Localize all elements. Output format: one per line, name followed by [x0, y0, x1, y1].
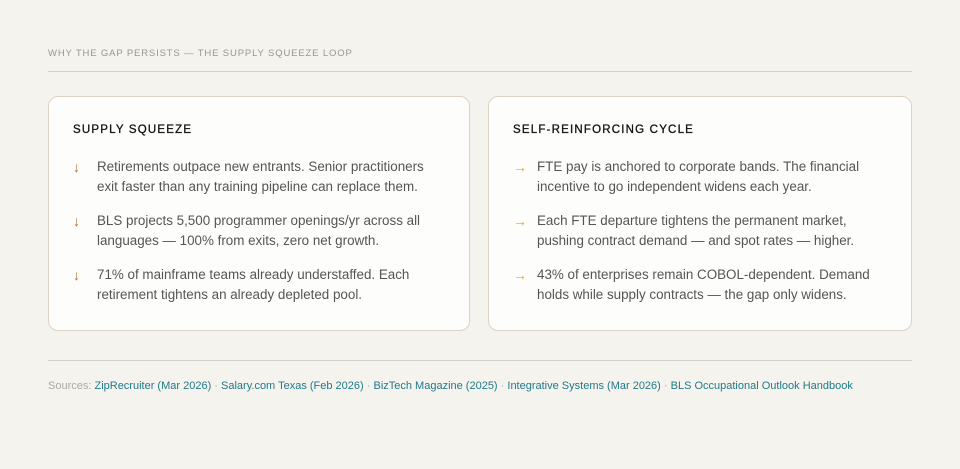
item 2: →	[513, 213, 527, 229]
heading: cycle: SELF-REINFORCING CYCLE	[513, 124, 694, 136]
item 3: →	[513, 267, 527, 283]
item 2: BLS projects 5,500 programmer openings/yr across all languages — 100% from exits, zero net growth.	[97, 213, 420, 248]
item 3: ↓	[73, 267, 80, 283]
heading: supply squeeze: SUPPLY SQUEEZE	[73, 124, 192, 136]
item 2: Each FTE departure tightens the permanent market, pushing contract demand — and spot rates — higher.	[537, 213, 854, 248]
panel: supply squeeze	[48, 96, 470, 331]
item 1: ↓	[73, 159, 80, 175]
item 1: →	[513, 159, 527, 175]
item 1: Retirements outpace new entrants. Senior practitioners exit faster than any training pipeline can replace them.	[97, 159, 424, 194]
item 2: ↓	[73, 213, 80, 229]
item 3: 43% of enterprises remain COBOL-dependent. Demand holds while supply contracts — the gap only widens.	[537, 267, 870, 302]
kicker heading: WHY THE GAP PERSISTS — THE SUPPLY SQUEEZE LOOP	[48, 48, 353, 59]
panel: self-reinforcing cycle	[488, 96, 912, 331]
sources: Sources: ZipRecruiter (Mar 2026) · Salary.com Texas (Feb 2026) · BizTech Magazine (2025) · Integrative Systems (Mar 2026) · BLS Occupational Outlook Handbook	[48, 380, 853, 392]
item 3: 71% of mainframe teams already understaffed. Each retirement tightens an already depleted pool.	[97, 267, 409, 302]
item 1: FTE pay is anchored to corporate bands. The financial incentive to go independent widens each year.	[537, 159, 859, 194]
